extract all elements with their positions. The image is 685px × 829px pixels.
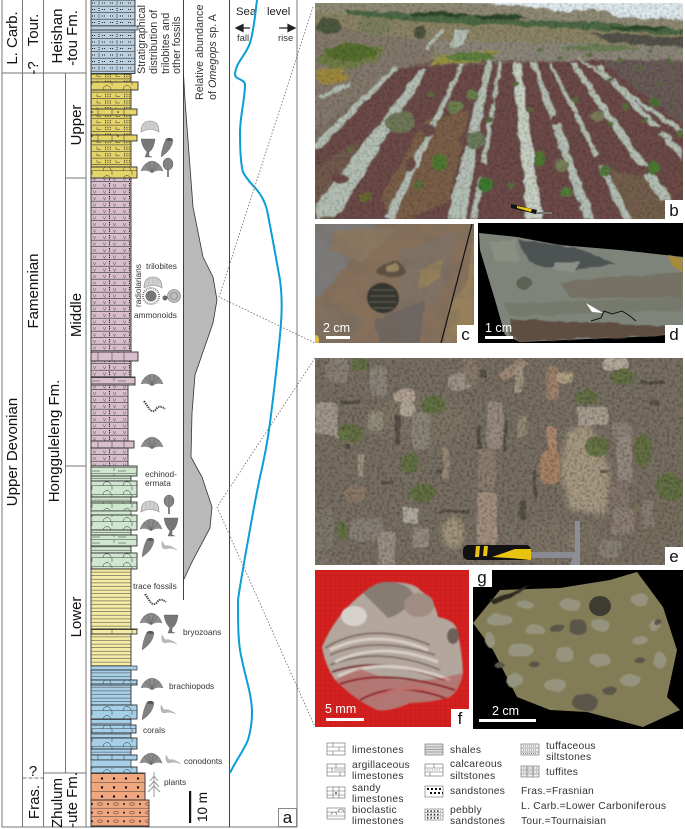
label: Hongguleleng Fm.: Hongguleleng Fm. (46, 380, 63, 502)
label: ute Fm.: -ute Fm. (64, 772, 81, 828)
lithology: Upper member yellow (91, 74, 138, 178)
heading: sea level (236, 6, 290, 18)
scale bar: 10 m: 10 m (195, 792, 210, 822)
legend text: pebbly sandstones: pebbly (450, 805, 482, 816)
icon: ammonoid (162, 290, 180, 302)
heading: relative abundance: of Omegops sp. A (207, 13, 219, 100)
legend text: bioclastic limestones: bioclastic (352, 805, 397, 816)
fossil: coral (142, 631, 154, 650)
dark gaps (340, 370, 665, 520)
label: Tour.: Tour. (25, 14, 42, 46)
abbreviation: Tour.: Tour.=Tournaisian (521, 816, 606, 827)
label: Zhulum: Zhulum (49, 778, 66, 828)
fossil: bryozoan (141, 139, 155, 157)
heading: sea level: level (267, 6, 290, 18)
fossil: echinoderm lower (164, 495, 174, 514)
label: trilobites: trilobites (146, 261, 177, 271)
panel label: d: d (669, 325, 679, 344)
panel label: b: b (669, 201, 679, 220)
panel label: c: c (461, 325, 470, 344)
icon: hammer in photo b (511, 204, 552, 214)
legend text: shales: shales (450, 745, 481, 756)
fossil: bryozoan lower (164, 518, 178, 536)
lithology: Heishantou tuffaceous siltstones (91, 0, 138, 74)
legend text: tuffites: tuffites (546, 767, 578, 778)
fossil: brachiopod middle lower (141, 437, 163, 449)
legend swatch: pebbly sandstones (425, 809, 443, 820)
legend text: calcareous siltstones: calcareous (450, 759, 502, 770)
lithology: Middle member pink tuffites (91, 178, 138, 466)
shrubs (316, 16, 683, 202)
abbreviation: Fras.: Fras.=Frasnian (521, 786, 594, 797)
heading: distribution of fossils: distribution of (148, 9, 160, 74)
scale bar: 2 cm: 2 cm (492, 704, 519, 718)
lithology: Lower member green limestones (91, 466, 137, 569)
legend text: argillaceous limestones: argillaceous (352, 760, 410, 771)
panel label: f: f (458, 709, 463, 728)
fossil: brachiopod (141, 678, 163, 690)
legend swatch: limestones (327, 743, 345, 755)
label: brachiopods: brachiopods (169, 681, 214, 691)
label: Fras.: Fras. (26, 785, 43, 819)
legend swatch: shales (425, 744, 443, 755)
fossil: conodont base (166, 755, 181, 764)
fossils: Upper member (141, 121, 173, 177)
scale bar: 10 m (189, 791, 210, 823)
photo d: slab with trace fossil (478, 223, 683, 344)
rock slab (479, 233, 683, 342)
icon: plant (148, 772, 160, 797)
legend (327, 741, 666, 827)
label: uncertain boundary: -? (25, 61, 42, 75)
legend text: tuffaceous siltstones: siltstones (546, 752, 591, 763)
legend text: sandstones: sandstones (450, 786, 505, 797)
label: Middle: Middle (68, 293, 85, 337)
panel a: stratigraphic column (2, 0, 297, 828)
trace fossil (591, 311, 636, 321)
label: L. Carb.: L. Carb. (4, 11, 21, 65)
label: plants: plants (164, 777, 186, 787)
label: echinodermata: ermata (145, 478, 171, 488)
panel label: d (665, 325, 683, 344)
scale bar: 1 cm (485, 323, 513, 339)
heading: distribution of fossils: trilobites and (160, 13, 172, 74)
rocks (315, 358, 654, 565)
heading: distribution of fossils: other fossils (171, 16, 183, 74)
rock slab (473, 572, 680, 727)
legend text: tuffaceous siltstones: tuffaceous (546, 741, 596, 752)
lithology: Zhulumute sandstones (91, 773, 149, 826)
fossil: trilobite middle (144, 277, 162, 288)
fossil: conodont lower (162, 541, 177, 550)
icon: rock hammer (463, 521, 580, 565)
label: Famennian: Famennian (25, 253, 42, 329)
fossil: brachiopod base (140, 753, 162, 765)
fossil: conodont blue (161, 705, 176, 714)
photo g: bioclastic limestone slab (473, 568, 683, 729)
panel label: a (278, 808, 296, 827)
legend swatch: tuffites (521, 766, 539, 777)
scale bar: 5 mm (326, 704, 364, 721)
label: tou Fm.: -tou Fm. (64, 10, 81, 66)
arrow: rise (279, 24, 295, 32)
grass patches (336, 359, 684, 539)
trilobite body (322, 582, 463, 710)
chart: sea level curve (230, 0, 282, 773)
fossil: coral (161, 138, 173, 157)
dotted connectors to photos (217, 7, 315, 727)
scale bar: 2 cm (324, 323, 350, 339)
arrow: fall (236, 24, 250, 32)
fossil: trace fossil (145, 594, 166, 604)
pale rock stripes (315, 30, 683, 219)
abbreviation: L. Carb.: L. Carb.=Lower Carboniferous (521, 801, 666, 812)
fossil: brachiopod bryozoan level (140, 613, 162, 625)
fossil: trace fossil middle (144, 401, 165, 411)
fossil: coral blue (142, 701, 154, 720)
photo f: enrolled trilobite specimen (315, 570, 469, 728)
label: conodonts: conodonts (184, 756, 222, 766)
heading: relative abundance (194, 5, 219, 100)
fossil: trilobite lower (141, 501, 159, 512)
panel label: c (457, 325, 474, 344)
legend swatch: argillaceous limestones (327, 764, 345, 776)
fossils: yellow and blue intervals (133, 581, 222, 797)
arrow: white pointer (586, 303, 603, 313)
legend text: pebbly sandstones: sandstones (450, 816, 505, 827)
panel label: g: g (477, 568, 487, 587)
chronostratigraphy labels (4, 8, 85, 828)
chart: abundance curve of Omegops (184, 74, 217, 580)
lithology: Lower member pale yellow shales (91, 569, 137, 666)
label: Upper: Upper (68, 105, 85, 145)
photo b: outcrop landscape (310, 0, 685, 225)
label: echinodermata: echinod- (145, 469, 177, 479)
scale bar: 1 cm: 1 cm (485, 321, 512, 335)
label: fall: fall (237, 33, 249, 44)
label: trace fossils: trace fossils (133, 581, 177, 591)
label: bryozoans: bryozoans (183, 627, 221, 637)
fossil: bryozoan (164, 615, 178, 633)
sky (468, 3, 683, 21)
label: uncertain boundary lower: ? (29, 763, 37, 780)
icon: trilobite fossil (366, 282, 400, 314)
fossil: conodont (162, 635, 177, 644)
label: radiolarians: radiolarians (133, 264, 143, 307)
fossils: green interval (140, 469, 178, 557)
legend swatch: calcareous siltstones (425, 764, 443, 776)
label: corals: corals (143, 725, 165, 735)
fossil: brachiopod lower (140, 519, 162, 531)
legend text: calcareous siltstones: siltstones (450, 771, 495, 782)
breaks across stripes (331, 96, 663, 209)
label: Lower: Lower (68, 597, 85, 637)
label: rise: rise (278, 33, 293, 44)
scale bar: 2 cm (479, 706, 536, 722)
label: Heishan-tou Fm.: Heishan (49, 8, 66, 64)
fossil: trilobite (141, 121, 159, 132)
fossil: brachiopod (141, 161, 163, 173)
fossil: coral lower (142, 538, 154, 557)
panel label: e (665, 547, 683, 566)
fossil: brachiopod middle upper (141, 374, 163, 386)
panel label: e: e (669, 547, 679, 566)
photo e: limestone nodules outcrop (315, 358, 684, 566)
photo c: trilobite on rock (313, 224, 474, 345)
legend swatch: sandstones (425, 786, 443, 797)
icon: radiolarian (143, 288, 159, 304)
panel label: g (473, 570, 492, 587)
scale bar: 5 mm: 5 mm (325, 702, 356, 716)
fossil: large shell hollow (589, 596, 611, 616)
legend swatch: bioclastic limestones (327, 808, 345, 819)
lithology: Lower member blue limestones (91, 666, 137, 773)
heading: sea level: Sea (236, 6, 257, 18)
legend text: sandy limestones: sandy (352, 783, 381, 794)
scale bar: 2 cm: 2 cm (323, 321, 350, 335)
legend text: argillaceous limestones: limestones (352, 771, 404, 782)
legend text: limestones: limestones (352, 745, 404, 756)
heading: distribution of fossils: Stratigraphical (136, 5, 148, 74)
fossils: Middle member (133, 261, 180, 449)
crack in photo c (441, 224, 472, 343)
legend text: bioclastic limestones: limestones (352, 816, 404, 827)
panel label: f (451, 709, 469, 728)
panel label: b (665, 200, 683, 220)
legend swatch: sandy limestones (327, 787, 345, 798)
label: ammonoids: ammonoids (134, 310, 177, 320)
legend text: sandy limestones: limestones (352, 794, 404, 805)
heading: relative abundance: Relative abundance (194, 5, 206, 100)
heading: distribution of fossils (136, 5, 183, 74)
legend swatch: tuffaceous siltstones (521, 744, 539, 755)
label: Upper Devonian: Upper Devonian (4, 398, 21, 506)
panel label: a: a (283, 808, 293, 827)
sandy patches (440, 426, 612, 550)
fossil: echinoderm (163, 158, 173, 177)
